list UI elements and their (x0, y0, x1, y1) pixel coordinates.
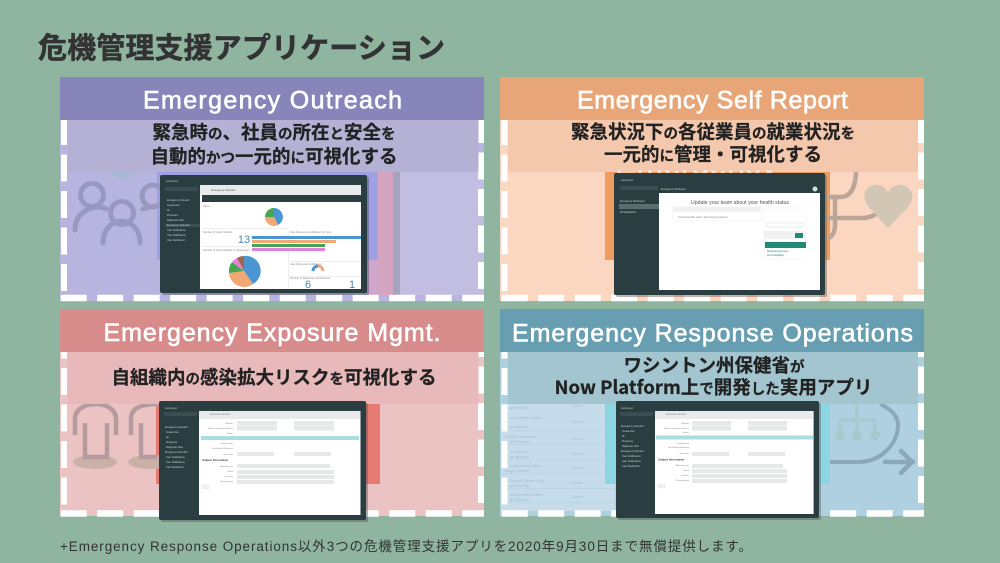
screenshot: response form: Properties (622, 440, 634, 443)
gauge (313, 266, 323, 271)
screenshot: response form: Create Alert (622, 430, 635, 433)
screenshot: dashboard: User Dashboard (167, 239, 185, 242)
screenshot: response form: servicenow (621, 407, 633, 410)
heading: Emergency Self Report (577, 86, 848, 114)
faint table list: ge (Weekly) (510, 440, 529, 444)
faint table list: 0 hours (571, 481, 583, 485)
screenshot: dashboard: Diagnostic Jobs (167, 219, 185, 222)
faint table list: 0 hours (571, 404, 583, 408)
header (60, 309, 484, 352)
info bar (656, 436, 813, 440)
faint table list: Cov Illness (510, 450, 527, 454)
screenshot: response form: User Notifications (622, 460, 642, 463)
screenshot: response form: All (622, 435, 625, 438)
form labels: Phone/phone (676, 480, 690, 482)
bar chart (252, 236, 361, 251)
form fields (692, 421, 787, 483)
faint table list: ge (Weekly) (510, 455, 529, 459)
header (500, 309, 924, 352)
form labels (208, 422, 234, 483)
status card: Current Health status: Reporting symptoms (678, 215, 728, 219)
form labels: Number (225, 422, 233, 425)
faint table list: Contact Coronavirus (505, 435, 537, 439)
faint table list: ge (Weekly) (510, 484, 529, 488)
form section heading: Subject Information (202, 458, 229, 462)
faint table list: ge (Weekly) (510, 498, 529, 502)
update card: and Availability (767, 253, 785, 257)
description text: 一元的に管理・可視化する (604, 141, 822, 167)
screenshot: exposure form: Create Alert (166, 431, 179, 434)
faint table list (501, 404, 615, 511)
screenshot: exposure form: Properties (166, 441, 178, 444)
screenshot: response form: Exposure Record (666, 412, 687, 416)
screenshot: exposure form: Exposure Record (210, 412, 231, 416)
footnote: +Emergency Response Operations以外3つの危機管理支援アプリを2020年9月30日まで無償提供します。 (60, 539, 752, 554)
heading: Emergency Outreach (143, 86, 402, 114)
icon: people (75, 184, 164, 243)
number: 13: 13 (238, 234, 250, 246)
description band (508, 120, 918, 172)
form labels: Start date (224, 453, 234, 456)
faint table list: 0 hours (571, 420, 583, 424)
dashed border (64, 330, 481, 510)
screenshot: exposure form: User Notifications (166, 461, 186, 464)
screenshot: response form: User Dashboard (622, 465, 640, 468)
description text (571, 118, 855, 167)
form labels (664, 422, 690, 482)
update card: Medical Expenses (767, 249, 789, 253)
dashed border (504, 116, 921, 295)
heading: Emergency Response Operations (512, 320, 913, 348)
heading: Emergency Exposure Mgmt. (104, 319, 440, 347)
panel: Emergency Response Operations (500, 309, 924, 520)
faint table list: ge (Weekly) (510, 425, 529, 429)
form labels: Not Notified Meetings (668, 446, 690, 449)
screenshot: dashboard: All (167, 209, 170, 212)
description band (68, 352, 478, 404)
faint table list: 0 hours (571, 466, 583, 470)
dashed border (504, 330, 921, 510)
screenshot: dashboard (160, 175, 369, 295)
status card (673, 207, 761, 221)
form labels: Report Submission Name (664, 427, 690, 430)
screenshot: dashboard: Number of Users Notified (203, 230, 233, 234)
description text: 緊急時の、社員の所在と安全を (152, 119, 396, 145)
screenshot: health status: Emergency Self Report (661, 188, 686, 191)
update card (764, 208, 806, 259)
screenshot: response form (616, 401, 821, 520)
form labels: Start date (680, 452, 690, 455)
form labels: Location (225, 475, 234, 478)
screenshot: dashboard: servicenow (166, 180, 178, 183)
screenshot: dashboard: User Response Notification (290, 262, 322, 266)
screenshot: exposure form: User Notifications (166, 456, 186, 459)
form labels: Phone/phone (220, 481, 234, 483)
screenshot: dashboard: Emergency Outreach (167, 224, 190, 227)
screenshot: health status: All Notifications (620, 211, 637, 214)
panel: Emergency Self Report (500, 77, 924, 301)
screenshot: exposure form: All (166, 436, 169, 439)
faint table list: 0 hours (571, 437, 583, 441)
form labels: Confirmation (221, 442, 234, 445)
number: 6: 6 (305, 279, 311, 291)
faint table list: 0 hours (571, 452, 583, 456)
form labels: Report Submission Name (208, 427, 234, 430)
form section heading: Subject Information (658, 458, 685, 462)
faint table list: usage (Weekly) (505, 469, 529, 473)
form labels: Number (681, 422, 689, 425)
pie chart (229, 256, 261, 287)
screenshot: dashboard: Emergency Outreach (167, 199, 190, 202)
screenshot: dashboard: User Response Notification by Type (290, 230, 332, 234)
description text: ワシントン州保健省が (623, 352, 805, 378)
header (60, 77, 484, 120)
faint table list: Isting Vaccine Deaf (510, 464, 540, 468)
screenshot: response form: Diagnostic Jobs (622, 445, 640, 448)
screenshot: dashboard: Alerts (203, 204, 210, 208)
description text: 自組織内の感染拡大リスクを可視化する (111, 364, 437, 390)
icon: heart and network (826, 169, 912, 238)
description text: Now Platform上で開発した実用アプリ (555, 374, 872, 400)
icon: figures (73, 404, 172, 469)
description text: 緊急状況下の各従業員の就業状況を (571, 118, 855, 144)
info bar (201, 436, 359, 440)
header (500, 77, 924, 120)
screenshot heading: Update your team about your health status (691, 200, 789, 206)
screenshot: exposure form (159, 401, 368, 522)
screenshot: response form: Emergency Outreach (621, 425, 644, 428)
screenshot: dashboard: Create Alert (167, 204, 180, 207)
screenshot: dashboard: Number of Users Notified by Department (203, 248, 250, 252)
screenshot: dashboard: Properties (167, 214, 179, 217)
screenshot: dashboard: User Notifications (167, 229, 187, 232)
screenshot: dashboard: Number of Response not Returned (290, 276, 331, 280)
screenshot: health status: servicenow (621, 179, 633, 182)
screenshot: exposure form: servicenow (165, 407, 177, 410)
form labels: Email (228, 471, 233, 473)
screenshot: exposure form: User Dashboard (166, 466, 184, 469)
screenshot: dashboard: Emergency Outreach (211, 188, 236, 192)
description text (150, 119, 398, 169)
screenshot: health status: Emergency Self Report (620, 200, 645, 203)
screenshot: exposure form: Emergency Outreach (165, 426, 188, 429)
form fields (237, 421, 334, 484)
description text: 自動的かつ一元的に可視化する (150, 143, 398, 169)
screenshot: exposure form: Diagnostic Jobs (166, 446, 184, 449)
form labels: Status (227, 432, 234, 435)
form labels: Location (681, 474, 690, 477)
screenshot: response form: Emergency Outreach (621, 450, 644, 453)
dashed border (64, 116, 481, 295)
pie chart (265, 208, 283, 226)
screenshot: dashboard: User Notifications (167, 234, 187, 237)
form labels: Affected user (220, 465, 233, 468)
form labels: Affected user (676, 464, 689, 467)
screenshot: exposure form: Emergency Outreach (165, 451, 188, 454)
title: 危機管理支援アプリケーション (38, 25, 445, 67)
screenshot: response form: User Notifications (622, 455, 642, 458)
form labels: Confirmation (677, 442, 690, 445)
screenshot: health status (614, 173, 827, 297)
description band (68, 120, 478, 172)
background word fragment: Emergency (615, 146, 777, 182)
form labels: Status (683, 431, 690, 434)
description text (555, 352, 872, 400)
panel: Emergency Outreach (60, 77, 484, 301)
form labels: Not Notified Meetings (212, 447, 234, 450)
icon: network loop with arrow (830, 404, 913, 473)
faint table list: Contact Tracker Child (510, 479, 544, 483)
faint table list: onal Mental Distress (510, 416, 542, 420)
description band (508, 352, 918, 404)
faint table list: 0 hours (571, 495, 583, 499)
faint table list: ge (Weekly) (510, 406, 529, 410)
number: 1: 1 (349, 279, 355, 291)
faint table list: ily Information Officer (510, 493, 544, 497)
form labels: Email (684, 470, 689, 472)
panel: Emergency Exposure Mgmt. (60, 309, 484, 522)
